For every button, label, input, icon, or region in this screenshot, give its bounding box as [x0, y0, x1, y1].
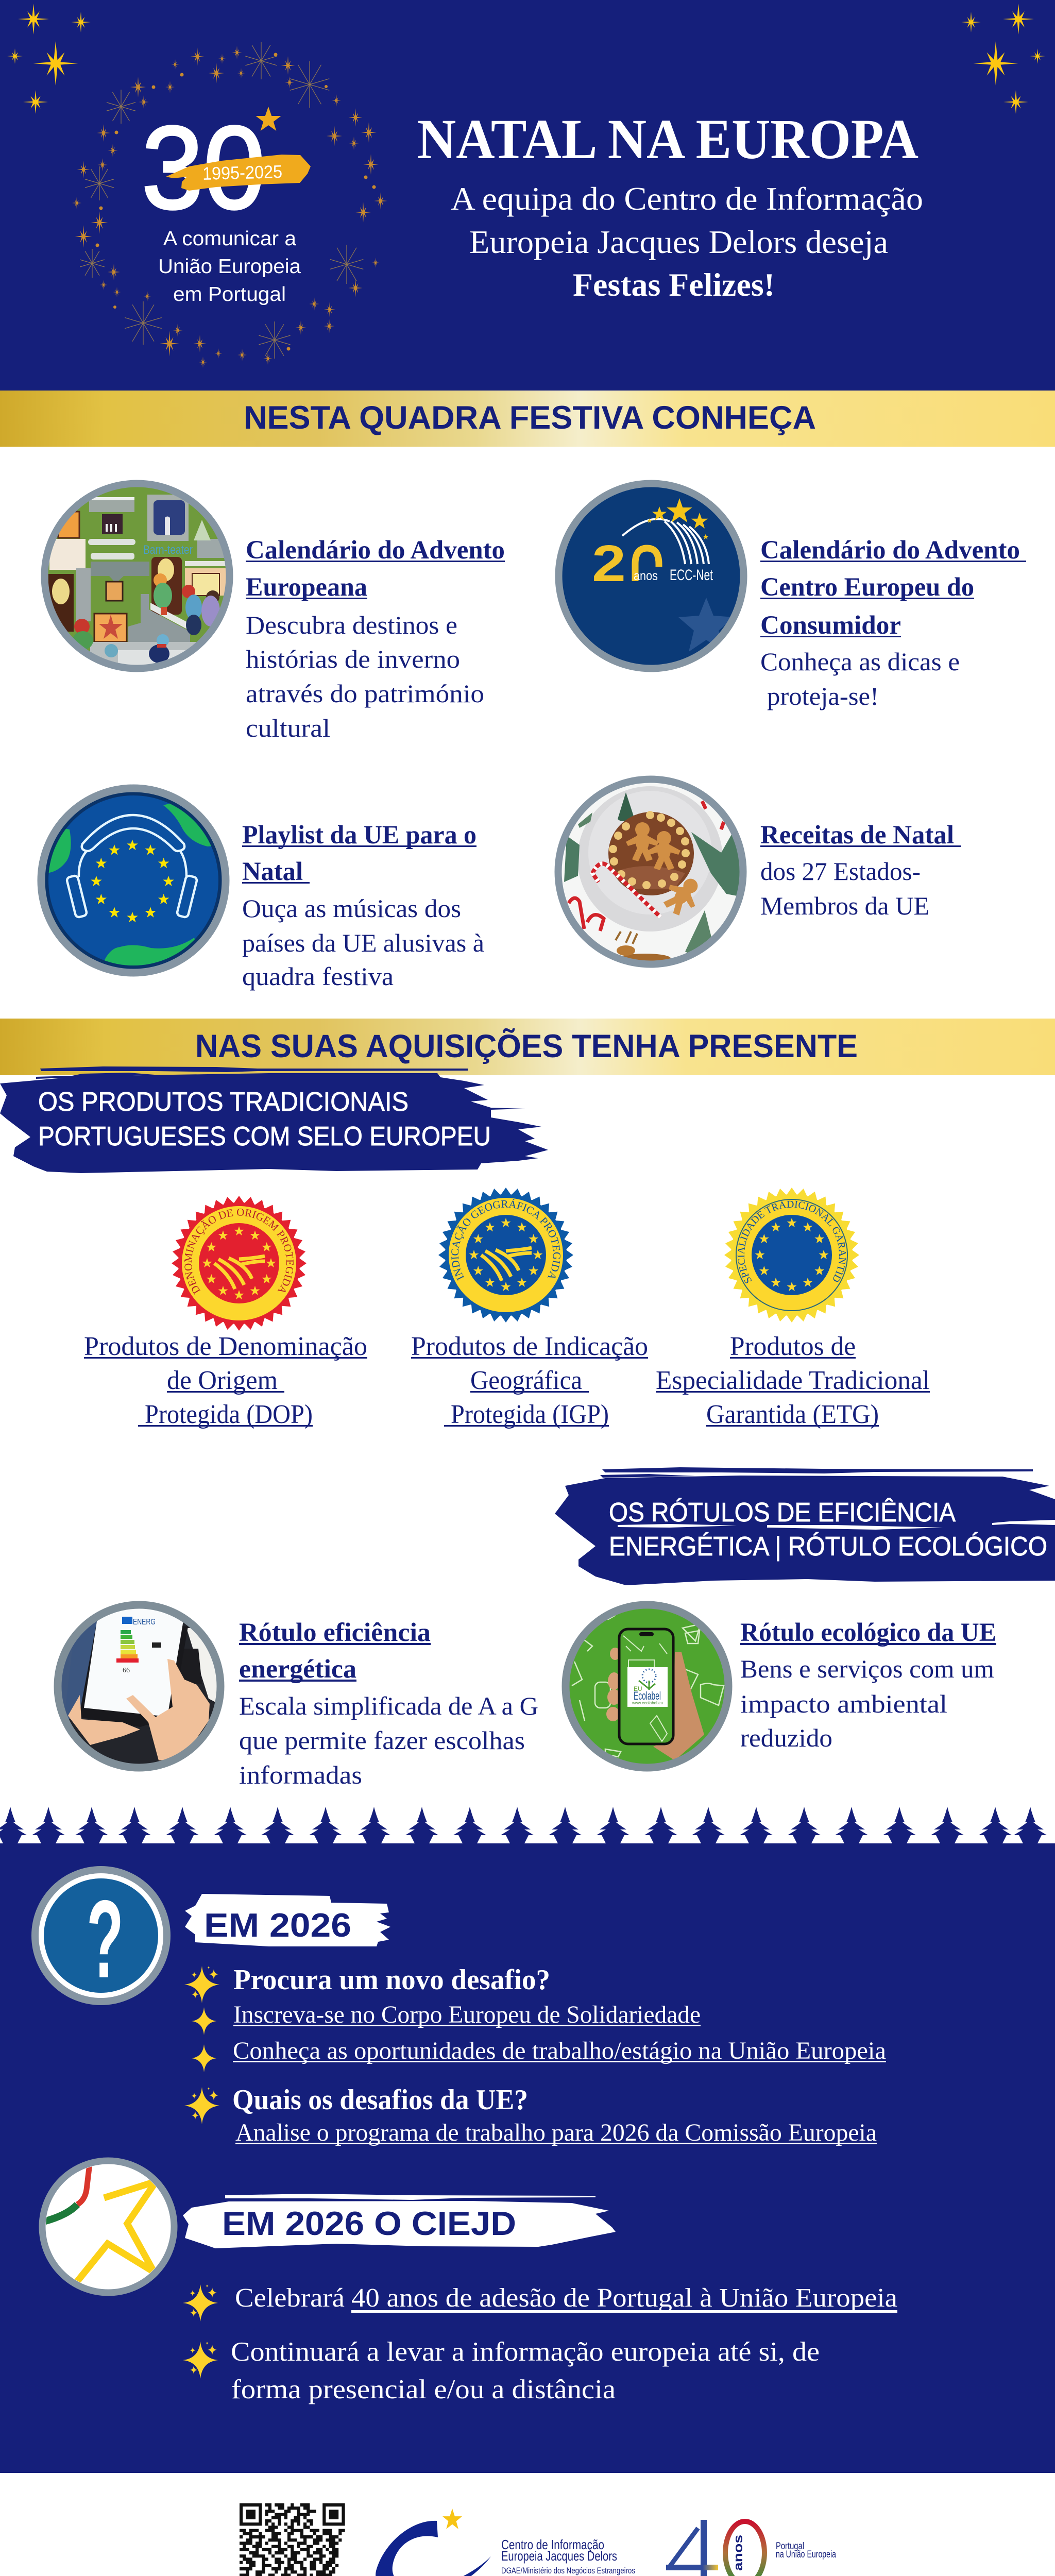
panel: receitas de natal	[556, 778, 961, 969]
heading: rótulos brush	[555, 1467, 1055, 1585]
text: greeting: Festas Felizes!	[573, 266, 775, 303]
text: receitas de natal: Receitas de Natal	[760, 821, 954, 850]
text: centro europeu do consumidor: Conheça as dicas e	[760, 647, 960, 676]
text: receitas de natal	[760, 821, 961, 920]
image: ECC-Net 20 anos logo: ECC-Net	[670, 567, 713, 584]
item: continuará a levar	[183, 2337, 820, 2404]
icon: ring of sparkles	[72, 42, 387, 368]
text: greeting: Europeia Jacques Delors deseja	[469, 224, 888, 260]
image: ECC-Net 20 anos logo: anos	[634, 569, 658, 583]
text: calendário europeana: Descubra destinos e	[246, 611, 457, 639]
item: celebrará 40 anos: Celebrará	[235, 2283, 345, 2313]
icon: gold stars left	[7, 4, 91, 114]
image: phone with EU Ecolabel: www.ecolabel.eu	[632, 1701, 663, 1705]
item: quais os desafios da UE	[184, 2084, 528, 2124]
text: rótulo ecológico: Rótulo ecológico da UE	[740, 1618, 996, 1647]
heading: rótulos brush: OS RÓTULOS DE EFICIÊNCIA	[609, 1498, 956, 1528]
panel: em 2026	[0, 1843, 1055, 2473]
logo: CIEJD: Europeia Jacques Delors	[501, 2548, 617, 2564]
heading: em 2026	[185, 1894, 390, 1946]
text: ETG caption: Garantida (ETG)	[706, 1400, 879, 1429]
text: playlist da UE	[242, 821, 484, 991]
text: calendário europeana: histórias de inverno	[246, 645, 460, 673]
logo: 40 anos: na União Europeia	[776, 2549, 836, 2560]
text: greeting	[451, 180, 923, 303]
logo: 40 anos	[666, 2520, 836, 2576]
text: centro europeu do consumidor	[760, 536, 1026, 710]
text: IGP caption	[411, 1332, 648, 1429]
text: IGP caption: Protegida (IGP)	[451, 1400, 609, 1429]
logo: 40 anos: Portugal	[776, 2541, 804, 2552]
item: quais os desafios da UE: Quais os desafios da UE?	[232, 2084, 528, 2116]
logo: CIEJD: DGAE/Ministério dos Negócios Estrangeiros	[501, 2566, 635, 2575]
panel: rótulo ecológico	[561, 1602, 996, 1772]
text: DOP caption: Protegida (DOP)	[145, 1400, 313, 1429]
text: calendário europeana: Europeana	[246, 573, 367, 602]
text: receitas de natal: Membros da UE	[760, 891, 929, 920]
text: receitas de natal: dos 27 Estados-	[760, 857, 921, 886]
heading: produtos tradicionais brush	[0, 1066, 548, 1173]
text: rótulo ecológico	[740, 1618, 996, 1752]
text: rótulo eficiência energética: energética	[239, 1655, 356, 1684]
text: tagline: União Europeia	[158, 256, 301, 278]
text: rótulo eficiência energética: informadas	[239, 1760, 362, 1789]
logo: CIEJD: Centro de Informação	[501, 2537, 604, 2552]
logo: 30 years: 1995-2025	[202, 162, 282, 184]
image: tablet with energy label: 66	[123, 1667, 130, 1674]
text: rótulo eficiência energética: Rótulo eficiência	[239, 1618, 431, 1647]
image: phone with EU Ecolabel: Ecolabel	[634, 1689, 661, 1702]
panel: header	[0, 0, 1055, 391]
panel: centro europeu do consumidor	[556, 479, 1026, 710]
panel: footer	[240, 2503, 836, 2576]
text: rótulo ecológico: impacto ambiental	[740, 1689, 947, 1718]
image: tablet with energy label: ENERG	[133, 1618, 156, 1626]
icon: question mark: ?	[87, 1877, 124, 2001]
text: calendário europeana: cultural	[246, 714, 330, 742]
text: playlist da UE: Playlist da UE para o	[242, 821, 477, 850]
text: rótulo eficiência energética: Escala simplificada de A a G	[239, 1691, 538, 1720]
text: playlist da UE: países da UE alusivas à	[242, 928, 484, 957]
link: programa de trabalho: Analise o programa de trabalho para 2026 da Comissão Europeia	[235, 2119, 877, 2146]
heading: nas suas aquisições tenha presente	[0, 1019, 1055, 1075]
text: calendário europeana: através do património	[246, 679, 484, 708]
panel: ETG	[656, 1188, 930, 1429]
heading: em 2026 o CIEJD	[183, 2194, 616, 2248]
icon: gold stars right	[961, 4, 1045, 114]
panel: em 2026 o CIEJD	[42, 2161, 897, 2404]
icon: IGP seal	[438, 1188, 573, 1323]
panel: playlist da UE	[41, 788, 484, 991]
heading: produtos tradicionais brush: PORTUGUESES COM SELO EUROPEU	[38, 1122, 491, 1151]
panel: calendário europeana	[44, 483, 505, 742]
icon: DOP seal	[172, 1196, 307, 1331]
text: DOP caption	[84, 1332, 367, 1429]
link: corpo europeu de solidariedade: Inscreva-se no Corpo Europeu de Solidariedade	[233, 2001, 701, 2028]
text: centro europeu do consumidor: proteja-se!	[767, 682, 879, 710]
logo: CIEJD	[376, 2509, 635, 2576]
decorative tree border	[0, 1807, 1047, 1843]
item: continuará a levar: Continuará a levar a informação europeia até si, de	[231, 2337, 820, 2367]
text: centro europeu do consumidor: Consumidor	[760, 611, 901, 640]
icon: DOP seal: DENOMINAÇÃO DE ORIGEM PROTEGIDA	[184, 1209, 294, 1295]
image: headphones with EU stars	[41, 788, 227, 974]
icon: CIEJD star	[42, 2161, 174, 2293]
text: centro europeu do consumidor: Calendário do Advento	[760, 536, 1020, 565]
text: centro europeu do consumidor: Centro Europeu do	[760, 573, 974, 602]
image: ECC-Net 20 anos logo: 2	[592, 535, 626, 592]
logo: 40 anos: anos	[731, 2535, 745, 2571]
heading: nesta quadra festiva conheça: NESTA QUADRA FESTIVA CONHEÇA	[244, 400, 816, 436]
panel: IGP	[411, 1188, 648, 1429]
text: ETG caption	[656, 1332, 930, 1429]
heading: em 2026: EM 2026	[204, 1906, 351, 1944]
item: celebrará 40 anos	[183, 2283, 897, 2321]
text: IGP caption: Geográfica	[470, 1366, 582, 1395]
text: calendário europeana	[246, 536, 505, 742]
text: rótulo eficiência energética	[239, 1618, 538, 1789]
link: oportunidades de trabalho: Conheça as oportunidades de trabalho/estágio na União Europeia	[233, 2037, 886, 2064]
text: playlist da UE: Ouça as músicas dos	[242, 894, 461, 923]
text: ETG caption: Produtos de	[730, 1332, 856, 1361]
image: advent street illustration	[44, 483, 230, 670]
text: playlist da UE: quadra festiva	[242, 962, 394, 991]
icon: IGP seal: INDICAÇÃO GEOGRÁFICA PROTEGIDA	[451, 1198, 560, 1281]
heading: produtos tradicionais brush: OS PRODUTOS TRADICIONAIS	[38, 1087, 409, 1117]
text: rótulo eficiência energética: que permite fazer escolhas	[239, 1726, 525, 1755]
image: phone with EU Ecolabel: EU	[634, 1685, 642, 1692]
image: gingerbread cake	[556, 778, 747, 969]
text: tagline	[158, 228, 301, 306]
panel: DOP	[84, 1196, 367, 1429]
text: ETG caption: Especialidade Tradicional	[656, 1366, 930, 1395]
text: IGP caption: Produtos de Indicação	[411, 1332, 648, 1361]
item: continuará a levar: forma presencial e/ou a distância	[231, 2375, 616, 2404]
heading: em 2026 o CIEJD: EM 2026 O CIEJD	[222, 2205, 516, 2242]
text: DOP caption: Produtos de Denominação	[84, 1332, 367, 1361]
text: rótulo ecológico: Bens e serviços com um	[740, 1654, 994, 1683]
text: playlist da UE: Natal	[242, 857, 303, 886]
image: advent street illustration: Barn-teater	[143, 543, 193, 557]
icon: QR code	[240, 2503, 345, 2576]
logo: 30 years: 30	[142, 103, 265, 233]
item: procura um novo desafio: Procura um novo desafio?	[233, 1964, 550, 1996]
text: rótulo ecológico: reduzido	[740, 1723, 832, 1752]
image: ECC-Net 20 anos logo	[556, 479, 747, 675]
icon: ETG seal: ESPECIALIDADE TRADICIONAL GARANTIDA	[738, 1200, 846, 1283]
heading: nesta quadra festiva conheça	[0, 391, 1055, 447]
item: celebrará 40 anos: 40 anos de adesão de Portugal à União Europeia	[351, 2283, 897, 2313]
image: phone with EU Ecolabel	[561, 1602, 734, 1772]
text: greeting: A equipa do Centro de Informação	[451, 180, 923, 217]
title: NATAL NA EUROPA	[417, 108, 918, 171]
panel: rótulo eficiência energética	[57, 1602, 538, 1789]
icon: question mark	[35, 1870, 167, 2002]
icon: ETG seal	[724, 1188, 859, 1323]
text: calendário europeana: Calendário do Advento	[246, 536, 505, 565]
heading: nas suas aquisições tenha presente: NAS SUAS AQUISIÇÕES TENHA PRESENTE	[195, 1028, 858, 1064]
text: tagline: A comunicar a	[163, 228, 296, 250]
image: tablet with energy label	[57, 1602, 227, 1772]
text: DOP caption: de Origem	[167, 1366, 278, 1395]
text: tagline: em Portugal	[173, 283, 286, 306]
item: procura um novo desafio	[184, 1964, 550, 2003]
